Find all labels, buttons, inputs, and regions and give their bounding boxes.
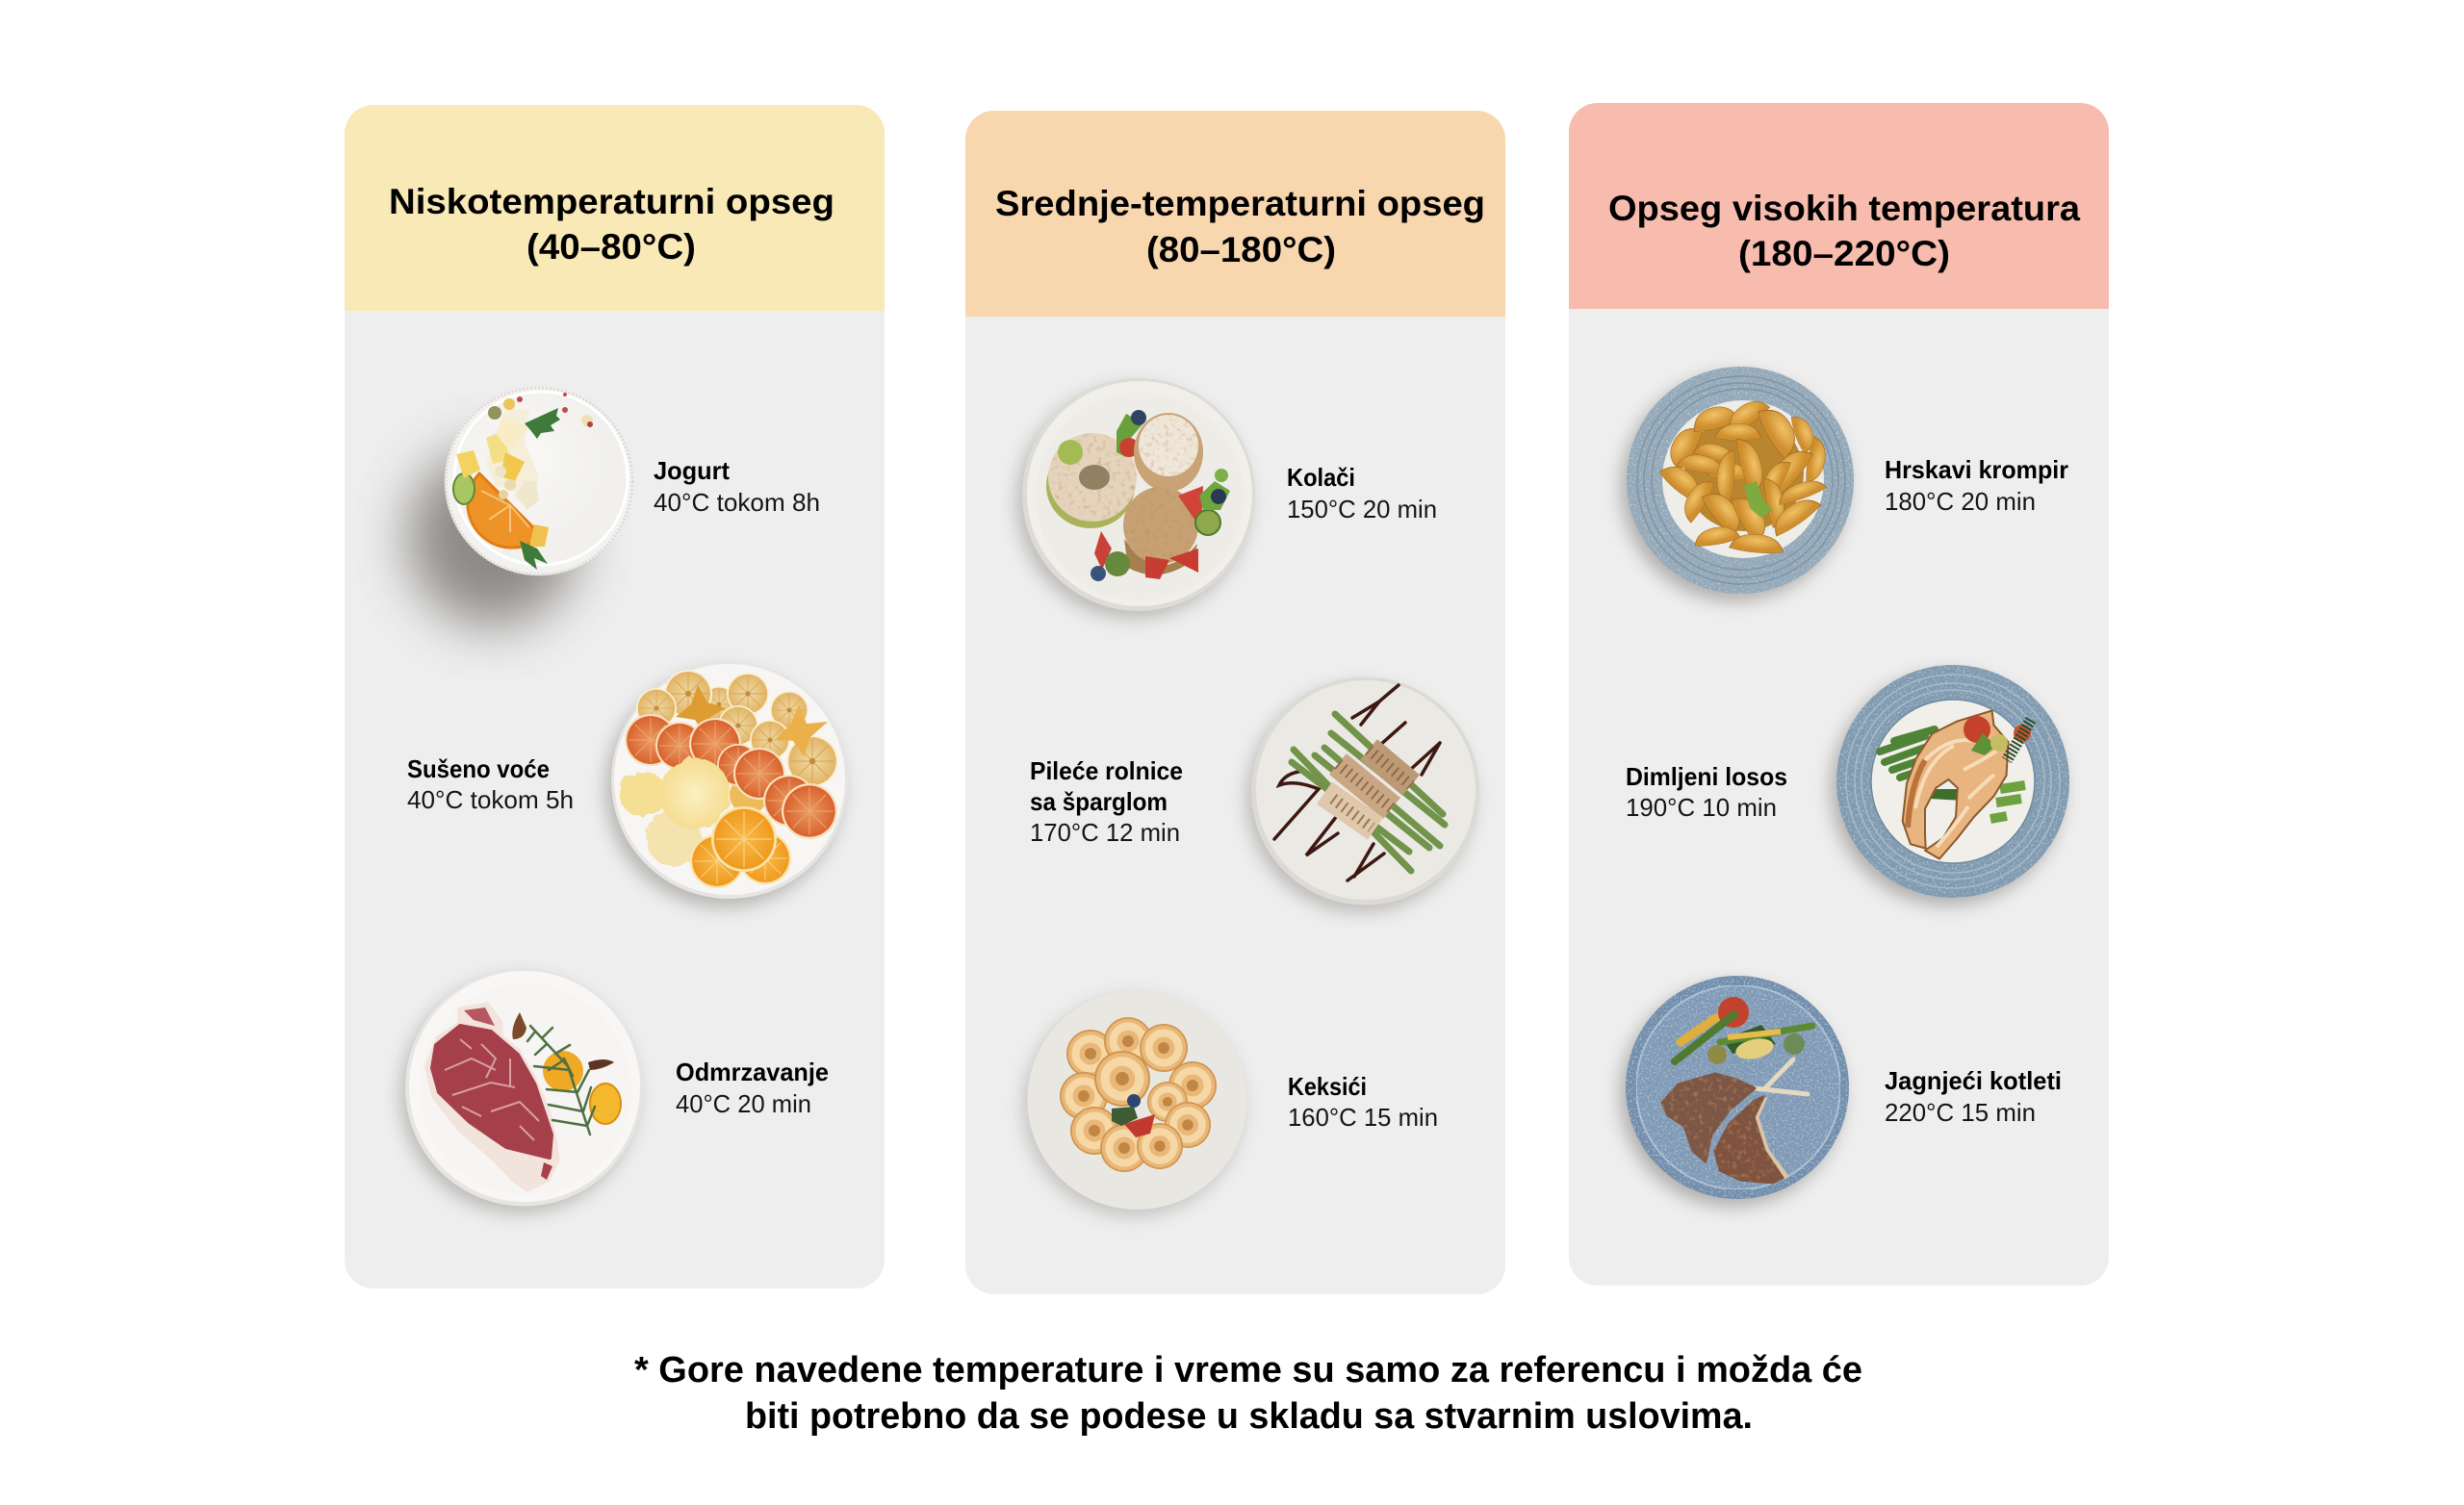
- footnote: [634, 1350, 1862, 1437]
- label: crispy potatoes: Hrskavi krompir: [1885, 455, 2068, 484]
- food: cookies plate: [1023, 990, 1247, 1216]
- panel background: [1569, 103, 2109, 1286]
- food: steak plate: [400, 968, 643, 1213]
- label: cakes: 150°C 20 min: [1287, 495, 1437, 523]
- footnote: biti potrebno da se podese u skladu sa stvarnim uslovima.: [745, 1396, 1753, 1437]
- label: smoked salmon: 190°C 10 min: [1626, 793, 1777, 822]
- label: yogurt: [654, 456, 820, 517]
- label: yogurt: Jogurt: [654, 456, 730, 485]
- label: cookies: [1288, 1072, 1438, 1132]
- label: crispy potatoes: [1885, 455, 2068, 516]
- label: chicken rolls: sa šparglom: [1030, 787, 1168, 816]
- label: cakes: Kolači: [1287, 463, 1355, 492]
- label: defrosting: [676, 1058, 829, 1118]
- panel background: [345, 105, 885, 1288]
- label: dried fruit: Sušeno voće: [407, 754, 550, 783]
- food: yogurt bowl: [408, 387, 633, 625]
- footnote: * Gore navedene temperature i vreme su samo za referencu i možda će: [634, 1350, 1862, 1390]
- heading: Opseg visokih temperatura: [1608, 189, 2080, 228]
- food: lamb chops plate: [1620, 976, 1849, 1207]
- heading: [1608, 189, 2080, 273]
- label: smoked salmon: Dimljeni losos: [1626, 762, 1787, 791]
- label: chicken rolls: Pileće rolnice: [1030, 756, 1183, 785]
- label: cakes: [1287, 463, 1437, 523]
- label: dried fruit: [407, 754, 574, 814]
- label: lamb chops: [1885, 1066, 2062, 1127]
- label: crispy potatoes: 180°C 20 min: [1885, 487, 2036, 516]
- food: salmon plate: [1831, 665, 2069, 906]
- panel: high temperature range: [1569, 103, 2109, 1286]
- panel: medium temperature range: [965, 111, 1505, 1294]
- label: lamb chops: Jagnjeći kotleti: [1885, 1066, 2062, 1095]
- food: cakes plate: [1016, 378, 1255, 619]
- header band: [965, 111, 1505, 317]
- panel: low temperature range: [345, 105, 885, 1288]
- heading: Srednje-temperaturni opseg: [995, 184, 1485, 223]
- label: chicken rolls: 170°C 12 min: [1030, 818, 1180, 847]
- label: lamb chops: 220°C 15 min: [1885, 1098, 2036, 1127]
- label: yogurt: 40°C tokom 8h: [654, 488, 820, 517]
- label: defrosting: Odmrzavanje: [676, 1058, 829, 1086]
- heading: Niskotemperaturni opseg: [389, 182, 834, 221]
- label: cookies: 160°C 15 min: [1288, 1103, 1438, 1132]
- label: dried fruit: 40°C tokom 5h: [407, 785, 574, 814]
- heading: (180–220°C): [1738, 234, 1950, 273]
- header band: [345, 105, 885, 311]
- heading: [995, 184, 1485, 269]
- heading: (40–80°C): [526, 227, 696, 267]
- heading: [389, 182, 834, 267]
- food: dried fruit plate: [605, 662, 848, 907]
- label: cookies: Keksići: [1288, 1072, 1367, 1101]
- label: smoked salmon: [1626, 762, 1787, 822]
- label: chicken rolls: [1030, 756, 1183, 847]
- food: potato wedges plate: [1621, 367, 1854, 601]
- panel background: [965, 111, 1505, 1294]
- heading: (80–180°C): [1146, 230, 1336, 269]
- header band: [1569, 103, 2109, 309]
- label: defrosting: 40°C 20 min: [676, 1089, 811, 1118]
- food: chicken rolls plate: [1246, 677, 1479, 912]
